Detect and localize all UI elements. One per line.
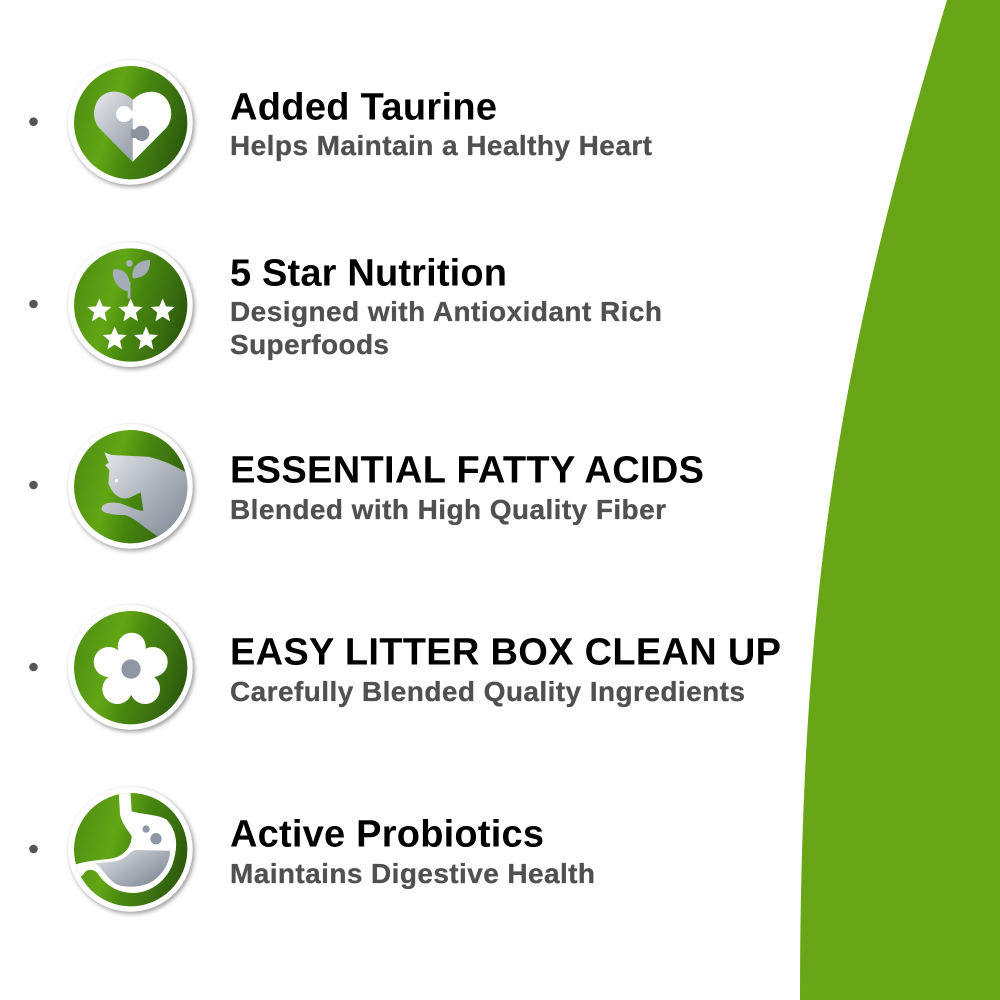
icon: cat silhouette [68,424,197,551]
heading: ESSENTIAL FATTY ACIDS [230,450,704,492]
bullet dot [29,663,38,671]
description: Blended with High Quality Fiber [230,494,666,525]
bullet dot [29,300,38,308]
description: Designed with Antioxidant Rich [230,296,662,327]
feature: Active Probiotics [29,786,595,914]
icon: puzzle heart [68,60,195,187]
heading: Active Probiotics [230,814,544,856]
heading: Added Taurine [230,86,497,128]
icon: stomach [68,786,195,914]
heading: 5 Star Nutrition [230,252,507,294]
icon: stars and sprout [68,242,195,369]
feature: 5 Star Nutrition: Superfoods [230,329,389,360]
bullet dot [29,117,38,126]
description: Carefully Blended Quality Ingredients [230,676,745,707]
description: Helps Maintain a Healthy Heart [230,130,652,161]
icon: flower [68,605,195,732]
bullet dot [29,845,38,853]
feature: Added Taurine [29,60,652,187]
feature: Easy Litter Box Clean Up [29,605,781,732]
feature: Essential Fatty Acids [29,424,704,551]
feature: 5 Star Nutrition [29,242,662,369]
description: Maintains Digestive Health [230,858,595,889]
bullet dot [29,481,38,489]
heading: EASY LITTER BOX CLEAN UP [230,632,781,674]
green curved panel [800,0,1000,1000]
